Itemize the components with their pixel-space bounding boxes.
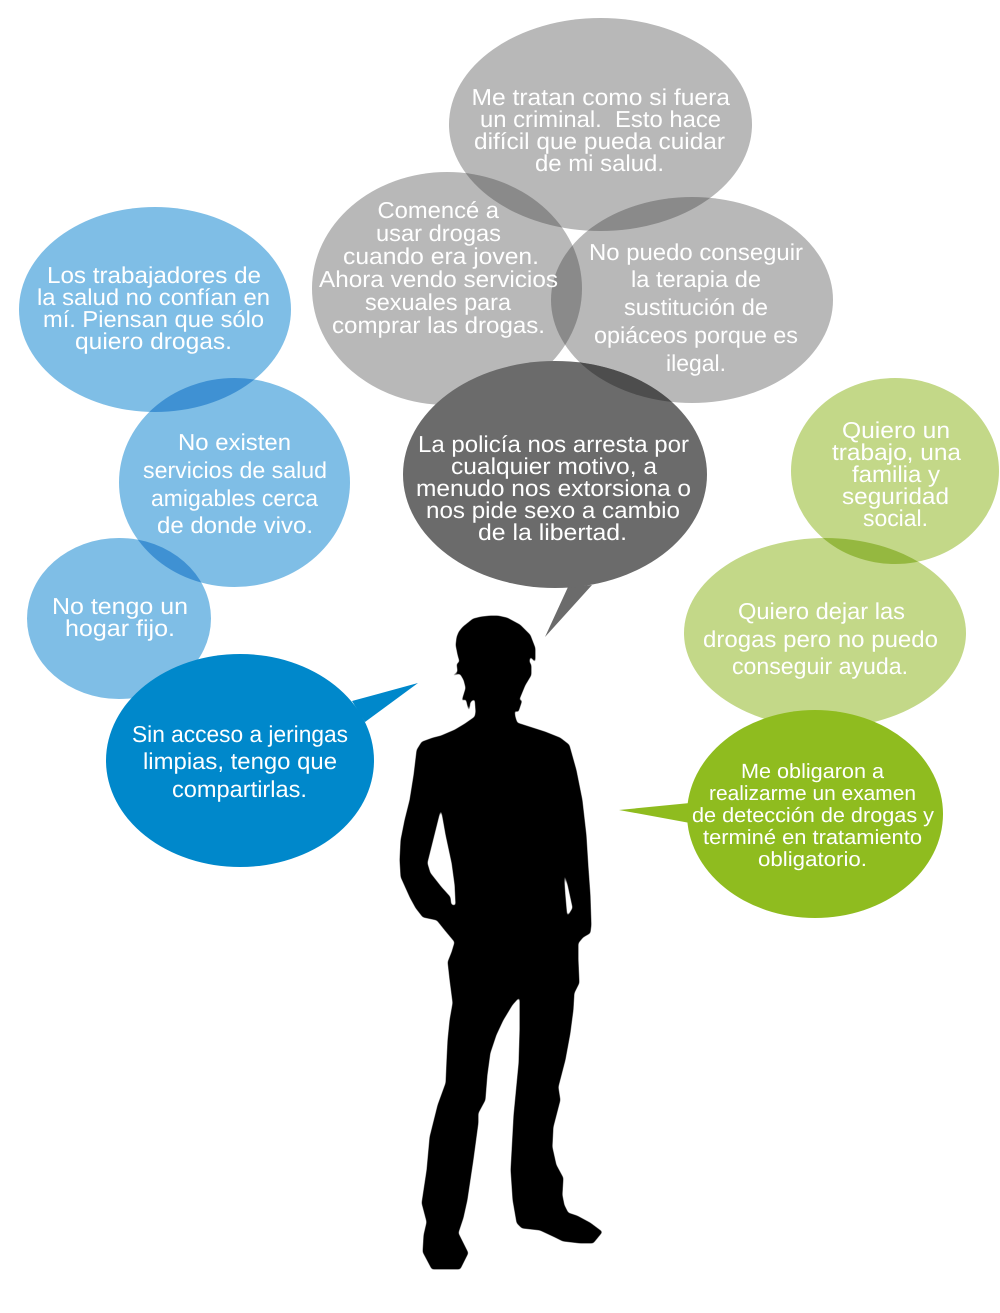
bubble: criminal treatment: difícil que pueda cuidar [474,128,725,154]
bubble: started using young: Ahora vendo servicios [319,266,558,292]
speech bubble: forced treatment: de detección de drogas y [692,804,935,827]
bubble: no fixed home: No tengo un [52,593,188,619]
speech bubble: police [403,361,707,637]
bubble: criminal treatment [449,18,752,231]
bubble: health workers distrust [19,207,291,412]
bubble: started using young: comprar las drogas. [332,312,545,338]
bubble: opioid substitution therapy: sustitución de [624,294,768,320]
bubble: started using young [312,172,582,405]
bubble: job, family, social security [791,378,999,564]
speech bubble: police: nos pide sexo a cambio [426,497,680,523]
bubble: no friendly health services: amigables cerca [151,485,318,511]
silhouette: standing person [400,616,602,1269]
speech bubble: police: cualquier motivo, a [451,453,657,479]
bubble: no friendly health services: de donde vivo. [157,512,313,538]
bubble: no fixed home: hogar fijo. [65,615,175,641]
bubble: opioid substitution therapy [551,197,833,403]
bubble: health workers distrust: quiero drogas. [75,328,232,354]
bubble: health workers distrust: Los trabajadores de [47,262,261,288]
bubble: no friendly health services: No existen [178,429,291,455]
speech bubble: forced treatment: obligatorio. [758,848,867,871]
bubble: no fixed home [27,538,211,699]
bubble: no friendly health services: servicios de salud [143,457,327,483]
speech bubble: forced treatment [619,710,943,918]
bubble: want to quit drugs: drogas pero no puedo [703,626,938,652]
bubble: health workers distrust: mí. Piensan que sólo [43,306,264,332]
bubble: started using young: cuando era joven. [343,243,539,269]
bubble: started using young: usar drogas [376,220,501,246]
bubble: job, family, social security: trabajo, una [832,439,961,465]
bubble: started using young: Comencé a [378,197,499,223]
bubble: criminal treatment: un criminal. Esto hace [480,106,721,132]
speech bubble: clean syringes [106,654,418,867]
bubble: job, family, social security: familia y [852,461,941,487]
bubble: want to quit drugs [684,538,966,728]
speech bubble: forced treatment: Me obligaron a [741,760,885,783]
bubble: opioid substitution therapy: opiáceos porque es [594,322,798,348]
bubble: criminal treatment: Me tratan como si fuera [472,84,730,110]
bubble: health workers distrust: la salud no confían en [37,284,270,310]
bubble: opioid substitution therapy: ilegal. [666,350,726,376]
bubble: opioid substitution therapy: la terapia de [631,266,761,292]
speech bubble: clean syringes: limpias, tengo que [143,748,337,774]
bubble: job, family, social security: social. [863,505,928,531]
speech bubble: forced treatment: terminé en tratamiento [703,826,922,849]
speech bubble: police: menudo nos extorsiona o [416,475,691,501]
bubble: want to quit drugs: Quiero dejar las [738,598,905,624]
bubble: no friendly health services [119,378,350,587]
speech bubble: police: La policía nos arresta por [418,431,689,457]
speech bubble: clean syringes: compartirlas. [172,776,307,802]
bubble: job, family, social security: Quiero un [842,417,950,443]
bubble: started using young: sexuales para [365,289,511,315]
bubble: job, family, social security: seguridad [842,483,949,509]
bubble: criminal treatment: de mi salud. [535,150,664,176]
bubble: want to quit drugs: conseguir ayuda. [732,653,908,679]
bubble: opioid substitution therapy: No puedo conseguir [589,239,803,265]
speech bubble: police: de la libertad. [478,519,627,545]
speech bubble: forced treatment: realizarme un examen [709,782,916,805]
speech bubble: clean syringes: Sin acceso a jeringas [132,721,348,747]
